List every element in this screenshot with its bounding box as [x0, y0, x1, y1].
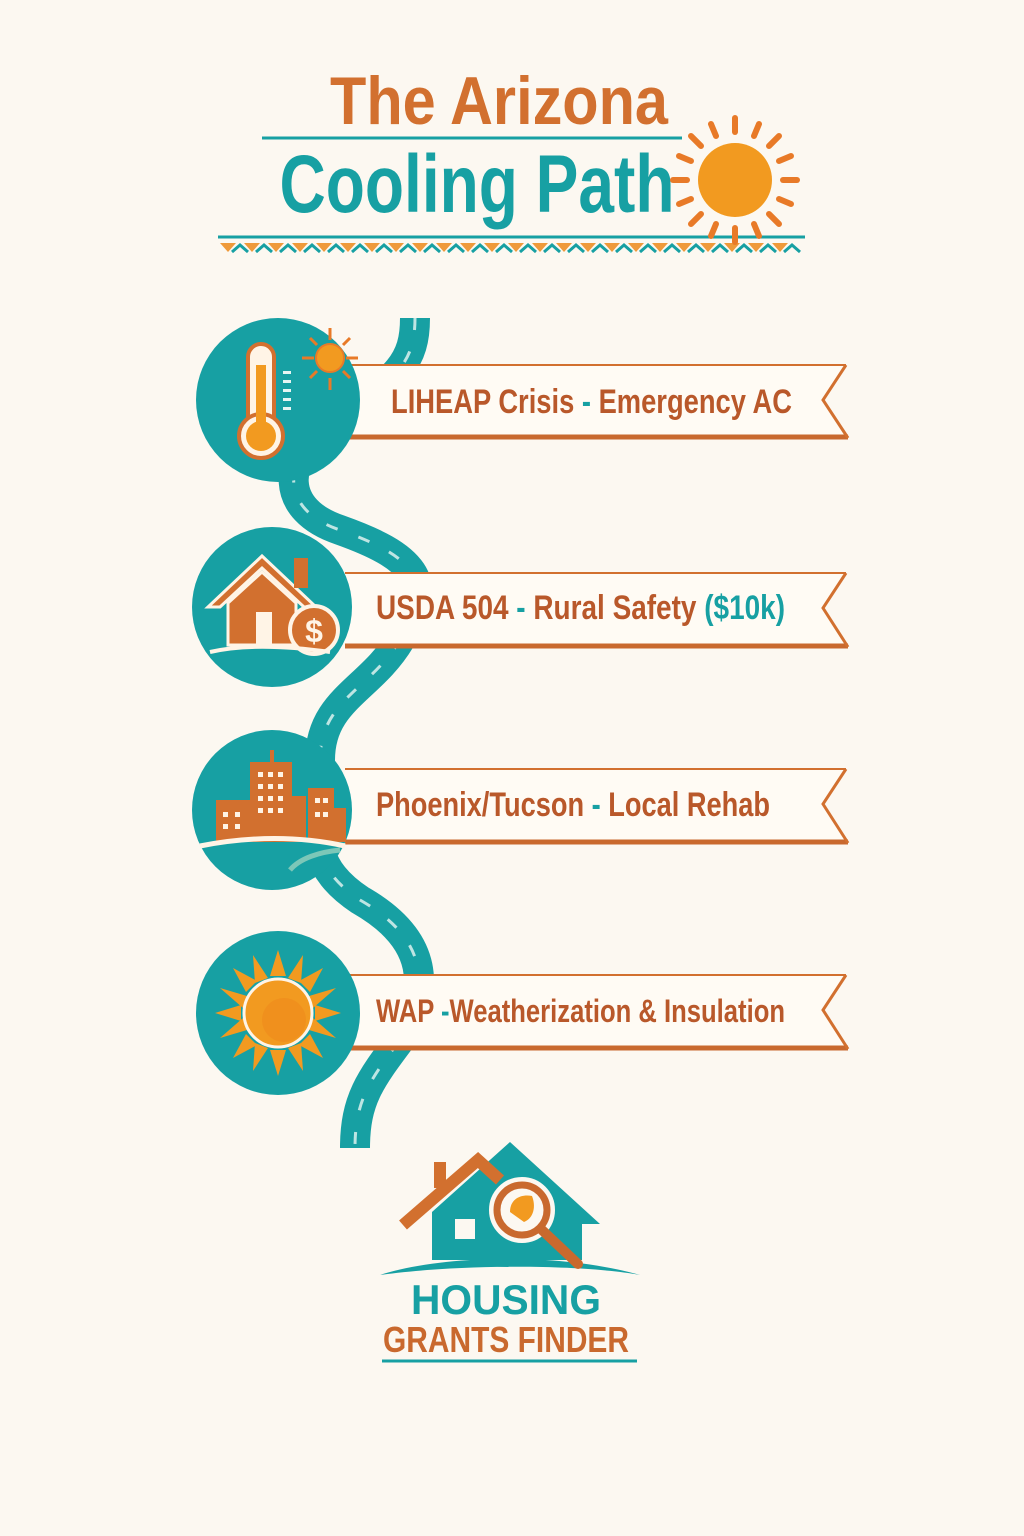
banner 4: WAP -Weatherization & Insulation: [376, 993, 785, 1029]
step 2: USDA 504: [192, 527, 848, 687]
banner 2: [345, 573, 848, 647]
icon: title sun: [673, 118, 797, 242]
logo: housing grants finder: GRANTS FINDER: [383, 1319, 629, 1360]
road path: [294, 318, 419, 1148]
icon: house with magnifier: [380, 1142, 640, 1275]
banner 3: [345, 769, 848, 843]
title: [218, 63, 805, 252]
logo: housing grants finder: HOUSING: [411, 1276, 601, 1323]
icon: thermometer circle: [196, 318, 360, 482]
icon: house with dollar: $: [305, 613, 323, 649]
step 1: LIHEAP: [196, 318, 848, 482]
banner 3: Phoenix/Tucson - Local Rehab: [376, 786, 770, 824]
banner 4: [345, 975, 848, 1049]
step 4: WAP: [196, 931, 848, 1095]
banner 2: USDA 504 - Rural Safety ($10k): [376, 589, 785, 627]
step 3: Phoenix/Tucson: [192, 730, 848, 890]
icon: house with dollar: [192, 527, 352, 687]
icon: city buildings: [192, 730, 352, 890]
banner 1: [345, 365, 848, 438]
icon: sun circle: [196, 931, 360, 1095]
title: Cooling Path: [280, 139, 674, 230]
logo: housing grants finder: [380, 1142, 640, 1361]
title: The Arizona: [330, 63, 669, 139]
banner 1: LIHEAP Crisis - Emergency AC: [391, 383, 792, 421]
